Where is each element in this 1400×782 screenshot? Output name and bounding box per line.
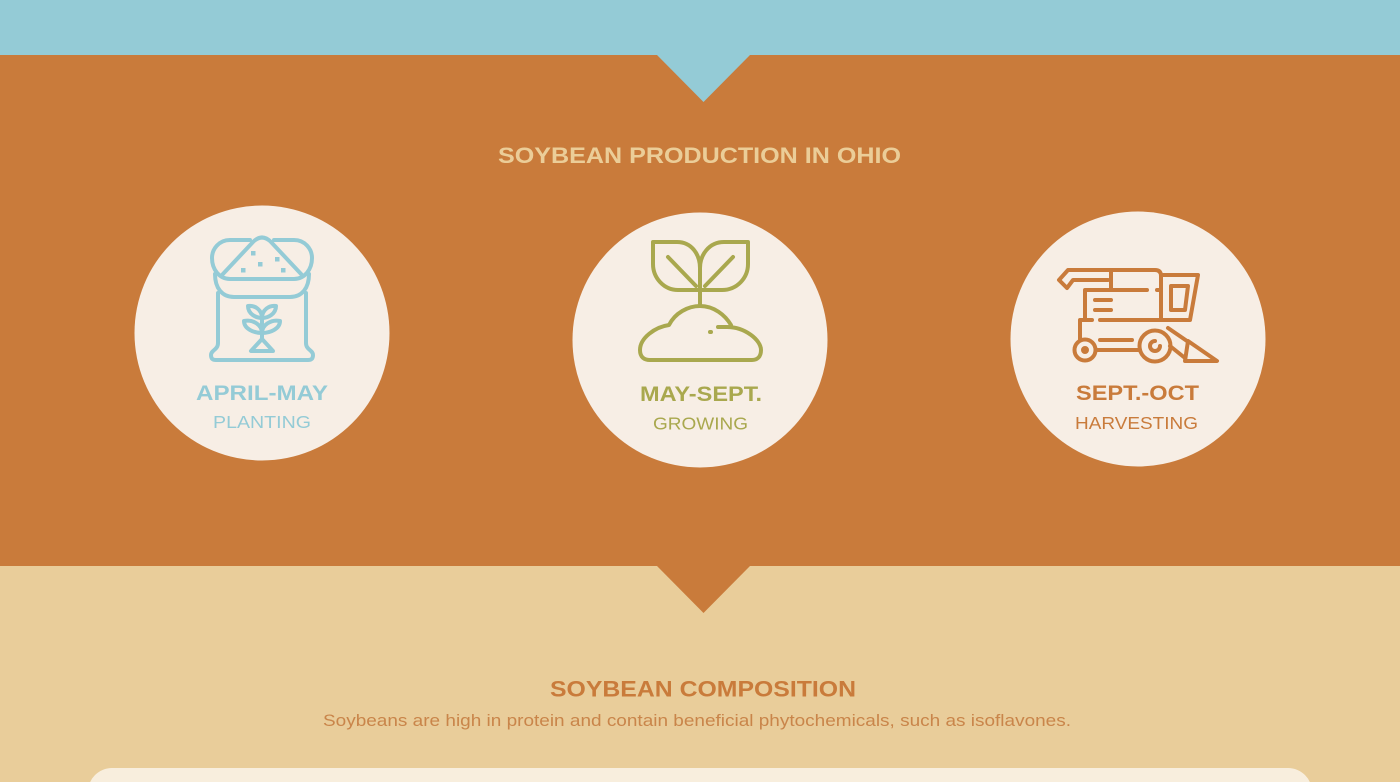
tan background section [0,566,1400,782]
panel: planting [134,206,390,460]
label: April-May: APRIL-MAY [196,382,328,405]
label: Sept.-Oct: SEPT.-OCT [1076,382,1199,405]
label: May-Sept.: MAY-SEPT. [640,383,762,406]
heading: soybean production in Ohio: SOYBEAN PRODUCTION IN OHIO [498,143,901,168]
icon: seed bag [211,238,313,360]
panel: growing [572,212,828,468]
panel: harvesting [1010,212,1266,466]
icon: sprout in soil [640,242,761,360]
panel: composition card [88,768,1312,782]
heading: soybean composition: SOYBEAN COMPOSITION [550,676,856,702]
orange production section [0,55,1400,613]
text: composition description: Soybeans are high in protein and contain beneficial phytochemicals, such as isoflavones. [323,711,1071,730]
icon: combine harvester [1059,270,1217,362]
label: planting: PLANTING [213,412,311,432]
label: growing: GROWING [653,414,748,434]
label: harvesting: HARVESTING [1075,413,1198,433]
blue top band with pointer [0,0,1400,102]
